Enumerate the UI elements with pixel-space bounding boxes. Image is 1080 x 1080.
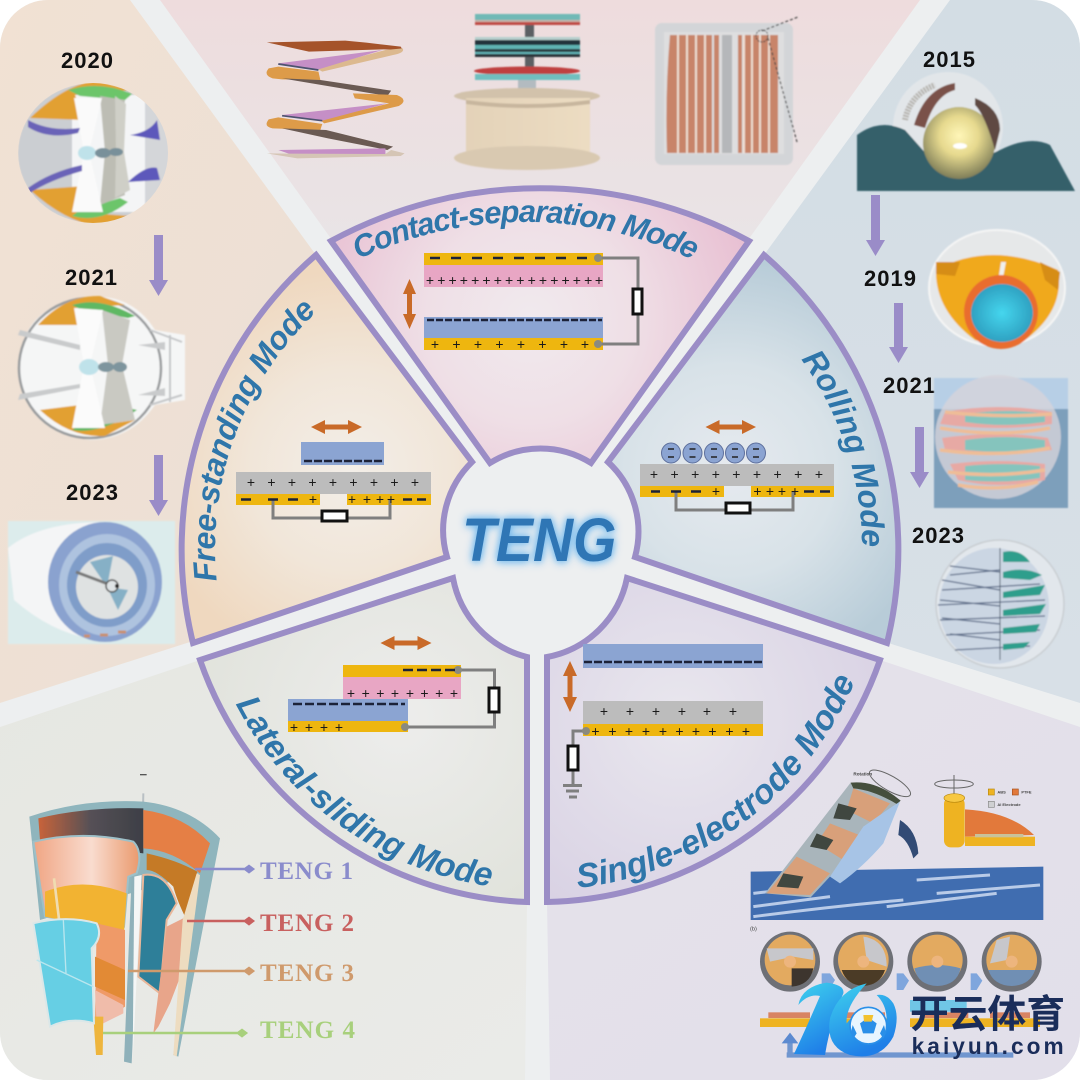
heading: single-electrode mode: Single-electrode Mode	[578, 676, 852, 888]
illustration: 2015 wave sphere	[857, 72, 1075, 191]
label: TENG 2: TENG 2	[260, 910, 354, 937]
panel: contact-separation background	[160, 0, 920, 240]
panel: lateral-sliding background	[0, 660, 527, 1080]
panel: free-standing background	[0, 0, 316, 703]
arrow: 2019 to 2021	[889, 303, 908, 363]
illustration: floating rotating TENG and diagrams: (b)	[750, 927, 757, 933]
logo text: latin: kaiyun.com	[912, 1033, 1064, 1059]
logo text: Chinese: 开云体育	[910, 994, 1065, 1037]
year label: 2019: 2019	[864, 266, 916, 291]
label: TENG 4: TENG 4	[260, 1017, 356, 1044]
label: TENG 1: TENG 1	[260, 858, 353, 885]
heading: rolling mode: Rolling Mode	[802, 350, 885, 546]
heading: free-standing mode: Free-standing Mode	[193, 302, 313, 580]
diagram: single-electrode: ++++++	[600, 703, 737, 719]
illustration: zigzag TENG	[267, 41, 405, 158]
diagram: single-electrode: ++++++++++	[591, 723, 750, 739]
arrow: 2020 to 2021	[149, 235, 168, 296]
diagram: free-standing: +++++++++	[247, 474, 419, 490]
diagram: lateral-sliding	[288, 636, 499, 735]
illustration: 2021 spiral sphere	[934, 375, 1068, 508]
diagram: contact-separation: ++++++++	[431, 336, 589, 352]
diagram: lateral-sliding: ++++	[290, 719, 343, 735]
illustration: 2020 device	[18, 82, 170, 226]
soccer ball	[850, 1007, 887, 1044]
illustration: disc stack on spool	[454, 14, 600, 170]
leader: TENG 1	[195, 866, 253, 872]
leader: TENG 2	[187, 918, 253, 924]
year label: 2023 left: 2023	[66, 480, 118, 505]
diagram: rolling: +++++	[712, 483, 799, 499]
illustration: 2023 device	[8, 521, 175, 644]
diagram: free-standing: +++++	[309, 491, 395, 507]
illustration: floating rotating TENG and diagrams	[750, 765, 1043, 1056]
diagram: free-standing	[236, 420, 431, 521]
arrow: 2021 to 2023	[149, 455, 168, 516]
diagram: rolling	[640, 420, 834, 513]
year label: 2015: 2015	[923, 47, 975, 72]
illustration: 2019 hemisphere	[929, 230, 1065, 349]
leader: TENG 3	[128, 968, 253, 974]
diagram: rolling: +++++++++	[650, 466, 823, 482]
label: TENG 3: TENG 3	[260, 960, 354, 987]
diagram: contact-separation: ++++++++++++++++	[426, 272, 603, 288]
diagram: lateral-sliding: ++++++++	[347, 685, 458, 701]
small labels: Rotation	[853, 771, 872, 776]
illustration: grey cylinder with copper fins	[655, 17, 798, 165]
arrow: 2015 to 2019	[866, 195, 885, 256]
heading: contact-separation mode: Contact-separation Mode	[354, 203, 698, 258]
watermark: kaiyun logo	[794, 983, 1065, 1059]
center title: TENG: TENG	[462, 507, 616, 575]
year label: 2021 left: 2021	[65, 265, 117, 290]
year label: 2020: 2020	[61, 48, 113, 73]
illustration: floating rotating TENG and diagrams: PTFE	[1021, 790, 1032, 795]
sector: lateral-sliding mode	[196, 574, 530, 906]
sector: free-standing mode	[178, 250, 476, 647]
illustration: floating rotating TENG and diagrams: ABS	[997, 790, 1006, 795]
heading: lateral-sliding mode: Lateral-sliding Mode	[236, 697, 492, 886]
sector: contact-separation mode	[326, 185, 754, 467]
illustration: floating rotating TENG and diagrams: Al Electrode	[997, 802, 1021, 807]
panel: rolling background	[764, 0, 1080, 703]
panel: single-electrode background	[547, 660, 1080, 1080]
diagram: contact-separation	[403, 253, 642, 352]
year label: 2021 right: 2021	[883, 373, 935, 398]
leader: TENG 4	[103, 1030, 246, 1036]
illustration: nested TENG cylinders	[29, 775, 220, 1063]
year label: 2023 right: 2023	[912, 523, 964, 548]
arrow: 2021 to 2023 right	[910, 427, 929, 488]
sector: single-electrode mode	[544, 574, 884, 905]
illustration: 2021 device	[18, 296, 185, 440]
illustration: 2023 net sphere	[936, 540, 1064, 668]
logo mark K	[794, 983, 843, 1055]
sector: rolling mode	[604, 250, 902, 647]
diagram: single-electrode	[563, 644, 763, 797]
